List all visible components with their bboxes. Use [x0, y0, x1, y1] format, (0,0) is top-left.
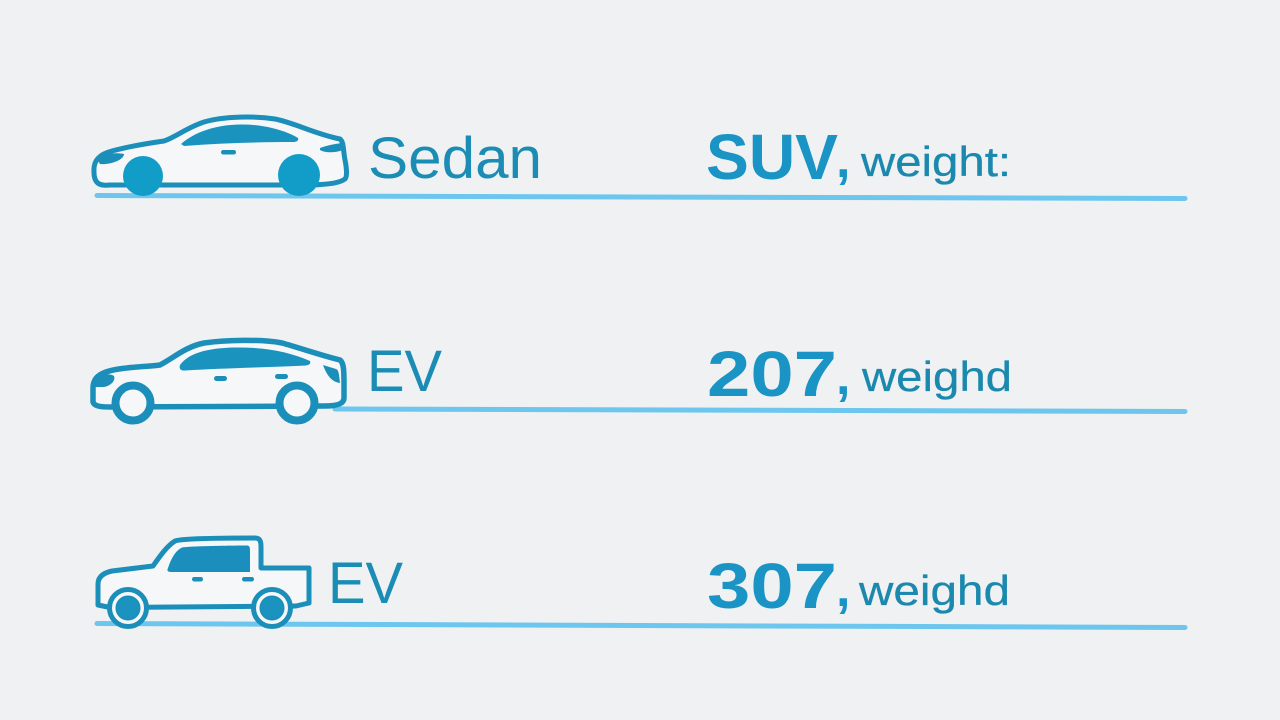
label: EV pickup: EV — [328, 551, 403, 616]
comma: , — [836, 131, 850, 189]
value: 307: 307 — [707, 550, 837, 622]
row: EV pickup — [97, 538, 1185, 628]
baseline rule: EV sedan — [335, 409, 1185, 412]
label: Sedan: Sedan — [368, 126, 542, 191]
row: EV sedan — [93, 338, 1185, 420]
row: sedan — [94, 117, 1185, 198]
comma: , — [836, 348, 850, 406]
value: SUV: SUV — [706, 121, 838, 193]
caption: weighd pickup: weighd — [858, 567, 1010, 614]
icon: EV car — [93, 340, 344, 420]
baseline rule: pickup — [97, 624, 1185, 628]
icon: pickup truck — [98, 538, 309, 626]
label: EV: EV — [367, 339, 442, 404]
icon: sedan car — [94, 117, 346, 196]
comma: , — [836, 560, 850, 618]
value: 207: 207 — [707, 338, 837, 410]
caption: weight: weight: — [860, 138, 1011, 185]
baseline rule: sedan — [97, 196, 1185, 198]
caption: weighd: weighd — [861, 353, 1012, 400]
